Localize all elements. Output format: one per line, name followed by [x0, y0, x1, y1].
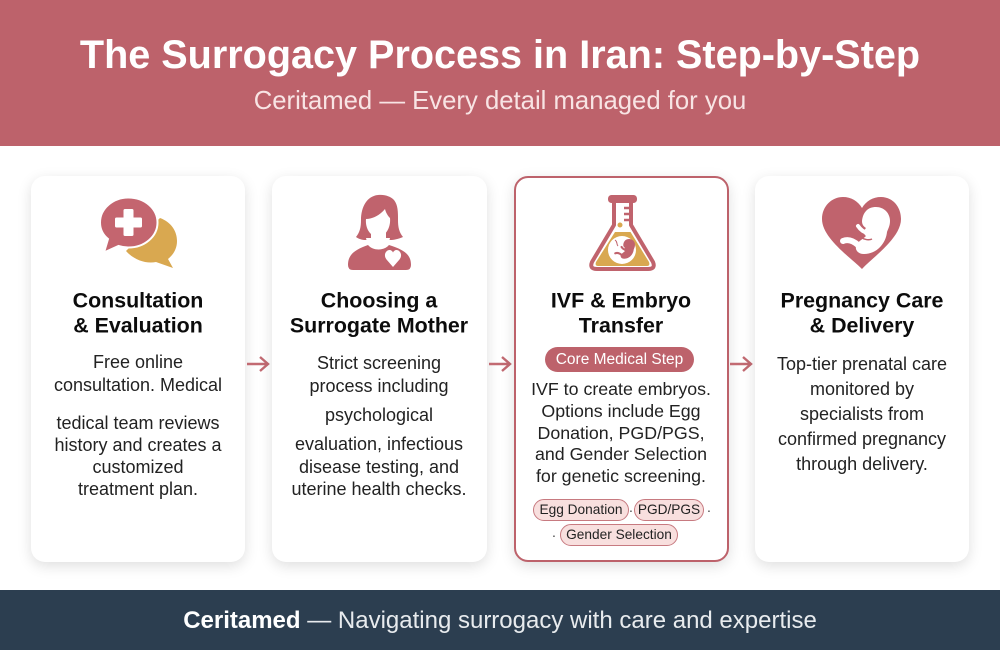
body text: evaluation, infectious [295, 434, 463, 454]
body text: for genetic screening. [536, 466, 706, 486]
heading: IVF & Embryo [551, 288, 691, 312]
body text: and Gender Selection [535, 444, 707, 464]
panel: step 3 IVF: · [629, 502, 633, 518]
panel: step 4 pregnancy [755, 176, 969, 562]
body text: consultation. Medical [54, 375, 222, 395]
body text: specialists from [800, 404, 924, 424]
heading line 2: Surrogate Mother [290, 313, 468, 337]
heading: Pregnancy Care [781, 288, 943, 312]
body text: confirmed pregnancy [778, 429, 946, 449]
panel: step 1 consultation [31, 176, 245, 562]
arrow 3 [730, 356, 753, 372]
chip: PGD/PGS [634, 499, 704, 521]
heading: Consultation [73, 288, 203, 312]
panel: step 3 IVF: · [552, 527, 556, 543]
chip: PGD/PGS: PGD/PGS [638, 502, 700, 517]
icon: flask with embryo [589, 195, 656, 271]
panel: step 3 IVF: · [707, 502, 711, 518]
footer text: Ceritamed — Navigating surrogacy with care and expertise [183, 607, 817, 634]
arrow 1 [247, 356, 270, 372]
body text: tedical team reviews [56, 413, 220, 433]
heading line 2: Transfer [579, 313, 663, 337]
body text: monitored by [810, 379, 914, 399]
body text: IVF to create embryos. [531, 379, 711, 399]
body text: process including [309, 376, 449, 396]
icon: heart with fetus [822, 197, 901, 269]
body text [54, 352, 222, 499]
chip: gender selection: Gender Selection [566, 527, 672, 542]
heading line 2: & Evaluation [73, 313, 203, 337]
body text [777, 354, 947, 474]
body text [291, 353, 467, 499]
title: The Surrogacy Process in Iran: Step-by-Step [80, 33, 920, 77]
subtitle: Ceritamed — Every detail managed for you [254, 87, 746, 115]
chip: gender selection [560, 524, 678, 546]
body text [531, 379, 711, 486]
heading line 2: & Delivery [810, 313, 914, 337]
body text: Free online [93, 352, 183, 372]
body text: through delivery. [796, 454, 928, 474]
body text: uterine health checks. [291, 479, 467, 499]
body text: Top-tier prenatal care [777, 354, 947, 374]
badge [545, 347, 694, 372]
heading: Choosing a [321, 288, 437, 312]
footer band [0, 590, 1000, 650]
panel: step 3 IVF [514, 176, 729, 562]
body text: history and creates a [54, 435, 222, 455]
panel: step 2 surrogate [272, 176, 487, 562]
body text: Strict screening [317, 353, 441, 373]
body text: Donation, PGD/PGS, [537, 423, 705, 443]
body text: treatment plan. [78, 479, 198, 499]
header band [0, 0, 1000, 146]
body text: disease testing, and [299, 457, 459, 477]
icon: medical chat bubbles [101, 198, 177, 268]
body text: Options include Egg [541, 401, 701, 421]
body text: customized [92, 457, 184, 477]
arrow 2 [489, 356, 512, 372]
chip: egg donation: Egg Donation [540, 502, 622, 517]
chip: egg donation [533, 499, 629, 521]
icon: woman with heart [348, 194, 411, 270]
body text: psychological [325, 405, 433, 425]
badge: Core Medical Step [556, 351, 683, 368]
